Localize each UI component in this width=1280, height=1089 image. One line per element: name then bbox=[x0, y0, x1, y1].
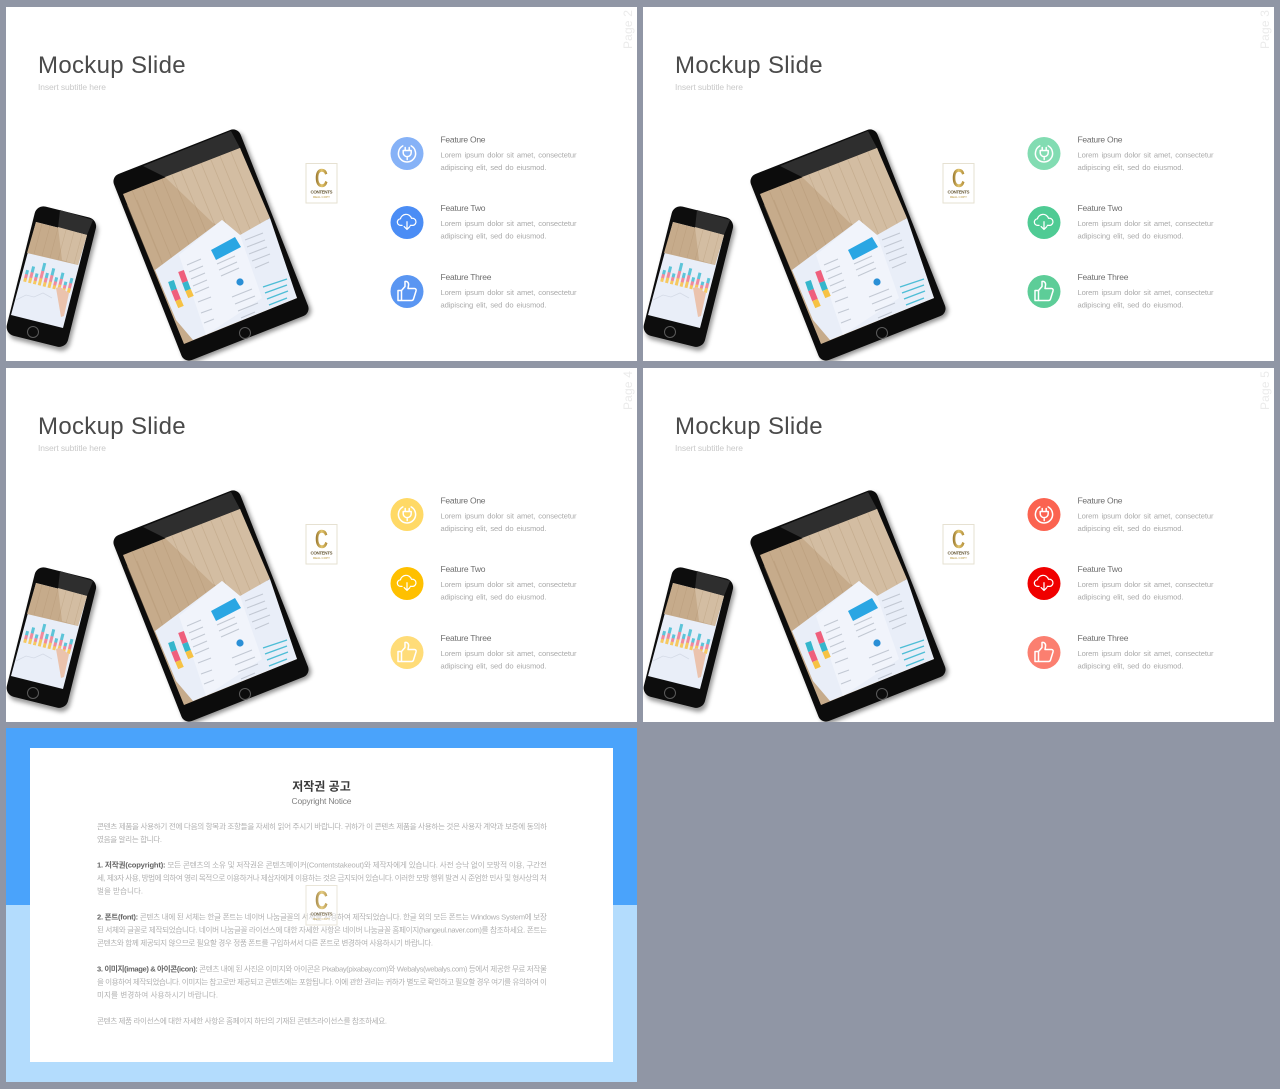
feature one: Lorem ipsum dolor sit amet, consectetur bbox=[440, 150, 577, 160]
logo: REAL COPY bbox=[950, 556, 967, 560]
logo bbox=[943, 163, 974, 203]
feature one: Feature One bbox=[440, 134, 486, 144]
feature two bbox=[390, 203, 577, 240]
page number: Page 3 bbox=[1258, 10, 1272, 49]
feature two: Feature Two bbox=[440, 564, 486, 574]
feature three: Lorem ipsum dolor sit amet, consectetur bbox=[440, 649, 577, 658]
feature one: Feature One bbox=[1078, 134, 1123, 144]
feature three bbox=[1028, 633, 1214, 670]
subtitle: Insert subtitle here bbox=[675, 443, 743, 453]
section 2 font: 된 서체와 글꼴로 제작되었습니다. 네이버 나눔글꼴 라이선스에 대한 자세한 사항은 네이버 나눔글꼴 홈페이지(hangeul.naver.com)를 참조하세요. 폰트는 bbox=[97, 924, 547, 934]
phone mockup bbox=[642, 565, 737, 714]
section 1 copyright: 벌을 받습니다. bbox=[97, 886, 143, 896]
heading: Mockup Slide bbox=[38, 52, 186, 79]
logo: CONTENTS bbox=[948, 550, 970, 556]
feature three: adipiscing elit, sed do eiusmod. bbox=[440, 662, 546, 670]
logo: REAL COPY bbox=[950, 195, 967, 199]
intro paragraph: 였음을 알리는 합니다. bbox=[97, 834, 162, 844]
logo: C bbox=[315, 885, 328, 915]
intro paragraph bbox=[97, 821, 547, 844]
feature three bbox=[1028, 272, 1214, 310]
panel: slide page 2 blue bbox=[6, 7, 637, 361]
logo: CONTENTS bbox=[310, 550, 332, 556]
feature three: adipiscing elit, sed do eiusmod. bbox=[1078, 662, 1184, 670]
heading: Mockup Slide bbox=[38, 413, 186, 440]
logo: C bbox=[315, 163, 328, 193]
feature one: adipiscing elit, sed do eiusmod. bbox=[440, 163, 546, 172]
feature three: adipiscing elit, sed do eiusmod. bbox=[1078, 300, 1184, 310]
feature two: Feature Two bbox=[440, 203, 486, 213]
feature two bbox=[1028, 203, 1214, 240]
feature two: Lorem ipsum dolor sit amet, consectetur bbox=[1078, 580, 1214, 589]
feature two: Lorem ipsum dolor sit amet, consectetur bbox=[440, 219, 577, 228]
logo: REAL COPY bbox=[313, 556, 330, 560]
feature one: adipiscing elit, sed do eiusmod. bbox=[440, 524, 546, 533]
panel: copyright notice bbox=[6, 728, 637, 1082]
heading: Mockup Slide bbox=[675, 52, 823, 79]
section 3 image and icon: 3. 이미지(image) & 아이콘(icon): 콘텐츠 내에 된 사진은 이미지와 아이콘은 Pixabay(pixabay.com)와 Webalys(webalys.com) 등에서 제공한 무료 저작물 bbox=[97, 964, 547, 974]
logo bbox=[306, 163, 337, 203]
logo: C bbox=[315, 524, 328, 554]
feature three: Feature Three bbox=[1078, 633, 1129, 643]
heading: Mockup Slide bbox=[675, 413, 823, 440]
panel: slide page 4 yellow bbox=[6, 368, 637, 722]
copyright subtitle: Copyright Notice bbox=[292, 796, 352, 806]
feature three: Feature Three bbox=[440, 272, 492, 282]
feature three bbox=[390, 272, 577, 310]
feature three: Lorem ipsum dolor sit amet, consectetur bbox=[440, 288, 577, 297]
logo: CONTENTS bbox=[310, 190, 332, 194]
closing line: 콘텐츠 제품 라이선스에 대한 자세한 사항은 홈페이지 하단의 기재된 콘텐츠라이선스를 참조하세요. bbox=[97, 1016, 387, 1026]
section 3 image and icon bbox=[97, 964, 547, 1000]
section 3 image and icon: 을 이용하여 제작되었습니다. 이미지는 참고로만 제공되고 콘텐츠에는 포함됩니다. 이에 관한 권리는 귀하가 별도로 확인하고 필요할 경우 여기를 유의하여 이 bbox=[97, 976, 547, 986]
tablet mockup bbox=[748, 488, 951, 726]
logo: REAL COPY bbox=[313, 917, 330, 921]
logo: REAL COPY bbox=[313, 195, 330, 199]
section 1 copyright: 1. 저작권(copyright): 모든 콘텐츠의 소유 및 저작권은 콘텐츠메이커(Contentstakeout)와 제작자에게 있습니다. 사전 승낙 없이 모방적 이용, 구간전 bbox=[97, 860, 547, 870]
section 2 font: 2. 폰트(font): 콘텐츠 내에 된 서체는 한글 폰트는 네이버 나눔글꼴의 서체를 사용하여 제작되었습니다. 한글 외의 모든 폰트는 Windows System에 보장 bbox=[97, 912, 547, 922]
page number: Page 5 bbox=[1258, 371, 1272, 410]
logo bbox=[306, 885, 337, 925]
feature two: Lorem ipsum dolor sit amet, consectetur bbox=[440, 580, 577, 589]
section 2 font: 콘텐츠와 함께 제공되지 않으므로 필요할 경우 정품 폰트를 구입하셔서 다른 폰트로 변경하여 사용하시기 바랍니다. bbox=[97, 938, 433, 948]
feature two: adipiscing elit, sed do eiusmod. bbox=[1078, 232, 1184, 240]
feature one: Feature One bbox=[440, 496, 486, 506]
logo: CONTENTS bbox=[948, 190, 970, 194]
subtitle: Insert subtitle here bbox=[675, 82, 743, 92]
page number: Page 2 bbox=[621, 10, 635, 49]
feature two: adipiscing elit, sed do eiusmod. bbox=[440, 232, 546, 240]
feature three: Lorem ipsum dolor sit amet, consectetur bbox=[1078, 288, 1214, 297]
panel: slide page 5 red bbox=[643, 368, 1274, 722]
logo bbox=[943, 524, 974, 564]
feature one bbox=[390, 496, 577, 533]
tablet mockup bbox=[111, 127, 314, 365]
logo: C bbox=[952, 163, 965, 193]
feature one: Lorem ipsum dolor sit amet, consectetur bbox=[440, 512, 577, 520]
feature three: Lorem ipsum dolor sit amet, consectetur bbox=[1078, 649, 1214, 658]
feature three bbox=[390, 633, 577, 670]
panel: slide page 3 green bbox=[643, 7, 1274, 361]
feature two: Feature Two bbox=[1078, 203, 1123, 213]
section 3 image and icon: 미지를 변경하여 사용하시기 바랍니다. bbox=[97, 990, 218, 1000]
phone mockup bbox=[5, 565, 100, 714]
phone mockup bbox=[5, 204, 100, 353]
copyright title: 저작권 공고 bbox=[292, 778, 351, 794]
subtitle: Insert subtitle here bbox=[38, 82, 106, 92]
feature one: adipiscing elit, sed do eiusmod. bbox=[1078, 524, 1184, 533]
logo bbox=[306, 524, 337, 564]
feature two: Feature Two bbox=[1078, 564, 1123, 574]
feature two: adipiscing elit, sed do eiusmod. bbox=[1078, 592, 1184, 602]
tablet mockup bbox=[111, 488, 314, 726]
section 1 copyright bbox=[97, 860, 547, 896]
feature three: adipiscing elit, sed do eiusmod. bbox=[440, 300, 546, 310]
feature one bbox=[390, 134, 577, 172]
intro paragraph: 콘텐츠 제품을 사용하기 전에 다음의 항목과 조항들을 자세히 읽어 주시기 바랍니다. 귀하가 이 콘텐츠 제품을 사용하는 것은 사용자 계약과 보증에 동의하 bbox=[97, 821, 547, 831]
feature two: adipiscing elit, sed do eiusmod. bbox=[440, 592, 546, 602]
logo: CONTENTS bbox=[310, 912, 332, 916]
section 1 copyright: 세, 제3자 사용, 방법에 의하여 영리 목적으로 이용하거나 제삼자에게 이용하는 것은 금지되어 있습니다. 이러한 모방 행위 발견 시 준엄한 민사 및 형사상의 처 bbox=[97, 872, 547, 882]
feature two: Lorem ipsum dolor sit amet, consectetur bbox=[1078, 219, 1214, 228]
feature two bbox=[1028, 564, 1214, 602]
feature three: Feature Three bbox=[1078, 272, 1129, 282]
feature one: Feature One bbox=[1078, 496, 1123, 506]
feature one: Lorem ipsum dolor sit amet, consectetur bbox=[1078, 150, 1214, 160]
feature two bbox=[390, 564, 577, 602]
logo: C bbox=[952, 524, 965, 554]
section 2 font bbox=[97, 912, 547, 948]
phone mockup bbox=[642, 204, 737, 353]
page number: Page 4 bbox=[621, 371, 635, 410]
feature one bbox=[1028, 134, 1214, 172]
feature one bbox=[1028, 496, 1214, 533]
tablet mockup bbox=[748, 127, 951, 365]
feature three: Feature Three bbox=[440, 633, 492, 643]
feature one: Lorem ipsum dolor sit amet, consectetur bbox=[1078, 512, 1214, 520]
feature one: adipiscing elit, sed do eiusmod. bbox=[1078, 163, 1184, 172]
subtitle: Insert subtitle here bbox=[38, 443, 106, 453]
